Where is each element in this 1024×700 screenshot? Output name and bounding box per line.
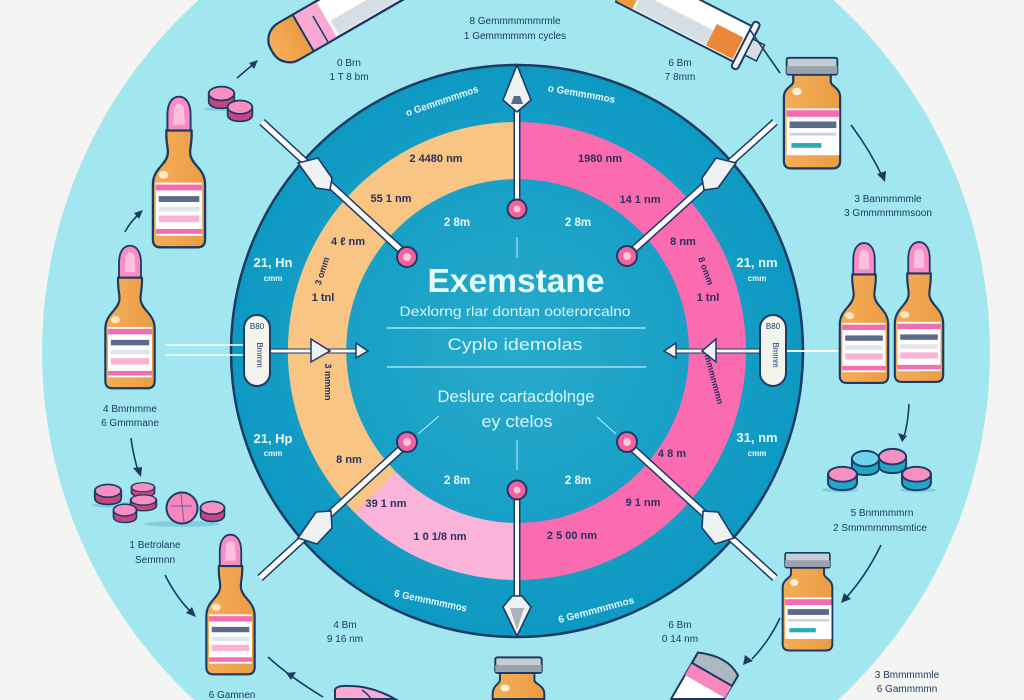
caption: left tablets: 1 Betrolane [129,540,181,551]
ring dose labels: 3 omm [313,256,331,286]
caption: top right dose [665,58,695,83]
item: left tablet group [92,483,224,527]
arrow: tablets to lower ampoule [165,575,196,617]
ring dose labels: 2 4480 nm [409,153,463,165]
caption: bottom left dose: 4 Bm [333,620,357,631]
time label: upper right [736,255,778,283]
item: ampoule left [105,246,155,388]
caption: bottom right dose: 0 14 nm [662,634,698,645]
time label: upper left [253,255,293,283]
spoke: left with pill: Bmmm [255,342,264,368]
item: top-right syringe [615,0,766,70]
spoke: upper right [617,122,775,266]
spoke: lower left [260,432,417,578]
center dosage label: ey ctelos [482,412,552,431]
spoke: right with pill [664,315,870,386]
caption: left tablets: Semmnn [135,555,175,566]
time label: upper right: cmm [748,274,766,283]
ring segment: light pink [355,472,517,580]
inner dose labels: 2 8m [565,217,591,229]
time label: lower right [736,430,778,458]
item: bottom-right syringe [671,652,738,699]
central dose wheel [231,65,803,637]
item: bottom vial [493,657,544,699]
caption: lower right vial: 3 Bmmmmmle [875,670,940,681]
outer ring labels: 6 Gemmmmmos [557,595,636,626]
center cycle label: Cyplo idemolas [448,335,582,354]
item: bottom-left broken tablet [335,686,395,699]
center subtitle: Dexlorng rlar dontan ooterorcalno [400,303,631,319]
ring dose labels: mmmnmmn [702,353,725,405]
arrow: vial to right ampoules [851,125,886,182]
ring dose labels: 2 5 00 nm [547,530,597,542]
outer ring labels: o Gemmmmmos [404,84,480,119]
item: top-left pink tablets [204,87,252,121]
item: ampoule right 2 [895,242,943,382]
arrow: right tablets to lower vial [841,545,881,603]
item: vial upper right [784,58,840,168]
ring dose labels: 1 tnl [697,292,719,304]
arrow: lower vial to bottom syringe [743,618,780,665]
arrow: top right syringe to vial [750,30,780,73]
caption: bottom left dose [327,620,363,645]
ring dose labels [312,153,725,543]
arrow: upper left ampoule [125,210,143,232]
ring dose labels: 55 1 nm [371,193,412,205]
ring dose labels: 1 tnl [312,292,334,304]
ring dose labels: 8 omm [696,256,715,286]
time label: lower right: cmm [748,449,766,458]
arrow: bottom item to lower ampoule [268,657,323,697]
item: vial lower right [783,553,832,651]
caption: left ampoule: 4 Bmmmme [103,404,157,415]
outer ring labels: 6 Gemmmmmos [393,588,468,615]
caption: left tablets [129,540,181,566]
spoke: right with pill: Bmmm [771,342,780,368]
ring dose labels: 9 1 nm [626,497,661,509]
item: right tablet group [822,449,936,492]
time label: lower left [253,431,293,458]
caption: top center: 1 Gemmmmmm cycles [464,31,566,42]
spoke: left with pill: B80 [250,322,265,331]
ring segment: orange [288,122,517,513]
ring dose labels: 8 nm [336,454,362,466]
arrow: right ampoules to tablets [898,404,909,442]
time label: lower left: cmm [264,449,282,458]
caption: top left dose [329,58,369,83]
item: ampoule lower left [206,535,255,674]
item: top-left syringe [267,0,405,64]
time label: upper left: 21, Hn [253,255,293,270]
caption: upper right vial [844,194,932,219]
spoke: top [503,65,531,218]
center dosage label: Deslure cartacdolnge [438,387,594,406]
caption: upper right vial: 3 Gmmmmmmsoon [844,208,932,219]
spoke: left with pill [165,315,368,386]
ring dose labels: 1 0 1/8 nm [413,531,467,543]
ring dose labels: 8 nm [670,236,696,248]
outer ring labels: o Gemmmmos [547,83,616,106]
caption: bottom right dose [662,620,698,645]
spoke: lower right [617,432,775,578]
caption: top center: 8 Gemmmmmmrmle [469,16,561,27]
caption: bottom right dose: 6 Bm [668,620,692,631]
center tick lines [418,237,616,470]
caption: right tablets: 2 Smmmmmmsmtice [833,523,927,534]
ring dose labels: 4 ℓ nm [331,236,365,248]
caption: top left dose: 0 Brn [337,58,361,69]
inner dose labels [444,217,591,487]
arrow: left ampoule to tablets [131,438,142,477]
caption: right tablets: 5 Bnmmmmrn [851,508,913,519]
caption: top right dose: 7 8mm [665,72,695,83]
time label: lower right: 31, nm [736,430,778,445]
spoke: upper left [262,122,417,267]
caption: left ampoule [101,404,159,429]
caption: top right dose: 6 Bm [668,58,692,69]
center dividers [387,328,646,367]
time label: upper right: 21, nm [736,255,778,270]
spoke: bottom [503,480,531,636]
center title: Exemstane [428,262,604,299]
center dosage label [438,387,594,431]
caption: top left dose: 1 T 8 bm [329,72,369,83]
caption: top center [464,16,566,42]
ring dose labels: 39 1 nm [366,498,407,510]
ring dose labels: 1980 nm [578,153,622,165]
inner dose labels: 2 8m [444,217,470,229]
item: ampoule right 1 [840,243,888,383]
spoke: right with pill: B80 [766,322,781,331]
caption: left ampoule: 6 Gmmmane [101,418,159,429]
ring dose labels: 3 mmmn [323,363,333,401]
caption: right tablets [833,508,927,534]
inner dose labels: 2 8m [444,475,470,487]
ring dose labels: 4 8 m [658,448,686,460]
ring segment: pink [517,122,746,580]
caption: lower right vial: 6 Gammmmn [877,684,937,695]
inner dose labels: 2 8m [565,475,591,487]
outer ring labels [393,83,636,626]
arrow: top left tablets to syringe [237,60,258,78]
caption: lower right vial [875,670,940,695]
time label: lower left: 21, Hp [253,431,293,446]
ring dose labels: 14 1 nm [620,194,661,206]
caption: upper right vial: 3 Banmmmmle [854,194,922,205]
caption: bottom left dose: 9 16 nm [327,634,363,645]
item: ampoule upper left [153,97,205,247]
time label: upper left: cmm [264,274,282,283]
